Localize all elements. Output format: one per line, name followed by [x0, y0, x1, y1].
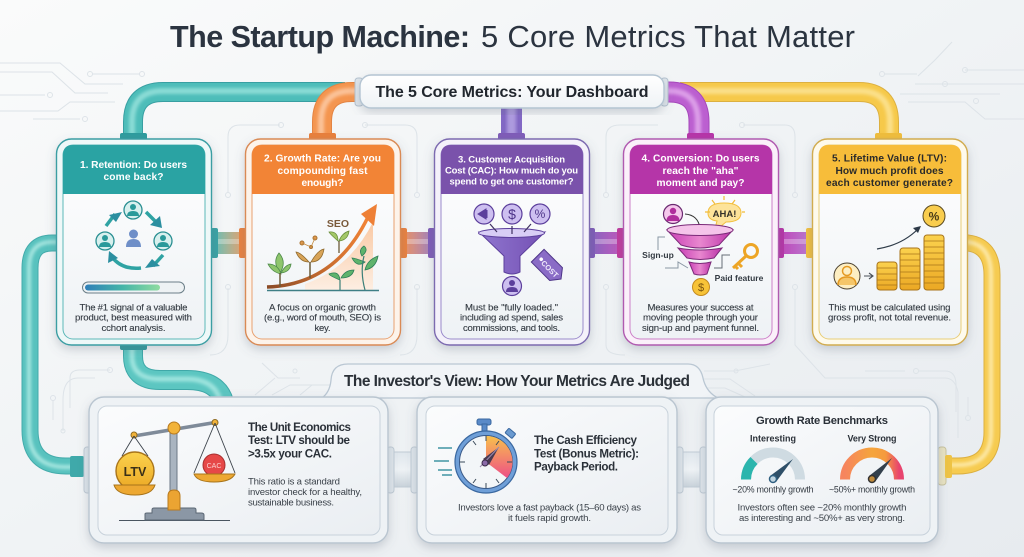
- chart: organic growth arrow: [267, 204, 379, 290]
- text: metric 3: commissions, and tools.: [463, 323, 560, 334]
- heading: metric 1: [80, 160, 187, 183]
- icon: retention loop: [96, 201, 172, 268]
- text: benchmarks: Investors often see ~20% monthly growth: [738, 502, 906, 514]
- icon: conversion funnel: [642, 196, 764, 296]
- pipe: magenta to card 4: [660, 91, 699, 136]
- heading: metric 1: come back?: [104, 172, 164, 183]
- icon: coin stacks growth: [834, 205, 945, 290]
- text: cash efficiency: Test (Bonus Metric):: [534, 448, 639, 460]
- text: metric 2: (e.g., word of mouth, SEO) is: [264, 312, 381, 324]
- text: cash efficiency: The Cash Efficiency: [534, 434, 638, 447]
- panel: investor view heading tab: [322, 364, 718, 398]
- icon: cost funnel: COST: [539, 259, 561, 280]
- panel: metric 5 lifetime value: [812, 133, 968, 345]
- icon: conversion funnel: Paid feature: [715, 273, 764, 283]
- pipe: yellow to card 5: [680, 91, 890, 136]
- text: metric 4: sign-up and payment funnel.: [642, 323, 759, 334]
- text: unit economics: This ratio is a standard: [248, 476, 340, 488]
- panel: metric 2 growth rate: [246, 133, 400, 345]
- panel: investor view heading tab: The Investor's View: How Your Metrics Are Judged: [344, 373, 690, 390]
- heading: benchmarks: Growth Rate Benchmarks: [756, 415, 888, 427]
- text: unit economics: The Unit Economics: [248, 421, 351, 434]
- heading: metric 3: Cost (CAC): How much do you: [445, 166, 578, 176]
- icon: conversion funnel: AHA!: [713, 209, 736, 220]
- connector: card 1 to card 2: [211, 228, 246, 258]
- icon: conversion funnel: $: [698, 282, 704, 294]
- heading: metric 4: moment and pay?: [656, 178, 744, 189]
- pipe: teal left to investor panel: [29, 242, 84, 477]
- text: unit economics: sustainable business.: [248, 498, 334, 508]
- heading: metric 2: [264, 154, 381, 189]
- text: metric 2: A focus on organic growth: [269, 302, 376, 314]
- text: metric 2: [264, 302, 381, 334]
- heading: metric 5: [826, 154, 953, 189]
- chart: organic growth arrow: SEO: [327, 218, 349, 230]
- text: metric 3: Must be "fully loaded.": [465, 302, 558, 314]
- icon: coin stacks growth: %: [929, 210, 940, 224]
- icon: cost funnel: $: [508, 206, 516, 222]
- icon: conversion funnel: Sign-up: [642, 250, 674, 260]
- text: benchmarks: as interesting and ~50%+ as very strong.: [739, 513, 905, 524]
- text: cash efficiency: [458, 434, 641, 524]
- heading: metric 5: each customer generate?: [826, 178, 953, 189]
- text: unit economics: [248, 421, 362, 508]
- icon: cost funnel: %: [535, 207, 546, 221]
- title: [170, 19, 855, 54]
- heading: metric 3: [445, 154, 578, 188]
- text: metric 1: cchort analysis.: [102, 323, 166, 334]
- text: metric 1: product, best measured with: [75, 312, 192, 324]
- heading: metric 2: 2. Growth Rate: Are you: [264, 154, 381, 164]
- panel: cash efficiency test: [417, 397, 677, 543]
- icon: balance scale: [114, 420, 235, 520]
- heading: metric 4: reach the "aha": [662, 166, 739, 177]
- text: cash efficiency: Payback Period.: [534, 460, 618, 474]
- icon: stopwatch: [434, 419, 517, 493]
- connector: panel 1 to panel 2: [387, 447, 418, 493]
- panel: metric 1 retention: [56, 133, 212, 350]
- gauge: very strong: ~50%+ monthly growth: [829, 484, 915, 494]
- heading: metric 5: How much profit does: [836, 166, 944, 177]
- title: The Startup Machine:: [170, 20, 470, 54]
- pipe: teal from card 1 down: [132, 343, 224, 402]
- text: metric 2: key.: [314, 323, 330, 334]
- heading: metric 3: spend to get one customer?: [450, 176, 574, 188]
- text: unit economics: Test: LTV should be: [248, 434, 351, 447]
- heading: metric 2: enough?: [302, 178, 344, 189]
- heading: metric 2: compounding fast: [278, 166, 368, 177]
- heading: metric 4: 4. Conversion: Do users: [642, 154, 760, 164]
- panel: dashboard heading: The 5 Core Metrics: Your Dashboard: [376, 84, 648, 101]
- text: metric 4: [642, 302, 759, 334]
- pipe: yellow right to investor panel: [938, 242, 992, 485]
- heading: metric 1: 1. Retention: Do users: [80, 160, 187, 171]
- heading: metric 3: 3. Customer Acquisition: [458, 154, 565, 166]
- pipe: purple to card 3: [501, 106, 522, 136]
- connector: card 2 to card 3: [400, 228, 435, 258]
- gauge: very strong: [829, 434, 915, 494]
- gauge: interesting: [732, 434, 814, 494]
- connector: panel 2 to panel 3: [676, 447, 707, 493]
- icon: balance scale: CAC: [207, 463, 221, 470]
- gauge: interesting: ~20% monthly growth: [732, 484, 814, 494]
- connector: card 4 to card 5: [777, 228, 813, 258]
- gauge: very strong: Very Strong: [848, 434, 896, 444]
- panel: metric 3 CAC: [434, 133, 590, 345]
- pipe: teal to card 1: [132, 91, 345, 136]
- title: 5 Core Metrics That Matter: [481, 19, 855, 54]
- text: metric 4: Measures your success at: [648, 302, 754, 314]
- text: metric 5: [828, 302, 951, 324]
- panel: growth rate benchmarks: [706, 397, 938, 543]
- text: metric 3: including ad spend, sales: [460, 312, 563, 324]
- text: metric 5: This must be calculated using: [828, 302, 950, 314]
- gauge: interesting: Interesting: [750, 434, 796, 444]
- text: unit economics: investor check for a healthy,: [248, 487, 362, 498]
- text: metric 3: [460, 302, 563, 334]
- text: metric 5: gross profit, not total revenue.: [828, 312, 951, 324]
- panel: metric 4 conversion: [624, 133, 778, 345]
- text: benchmarks: [738, 502, 906, 524]
- icon: cost funnel: [474, 204, 567, 296]
- progress bar: [82, 282, 184, 293]
- heading: metric 4: [642, 154, 760, 189]
- heading: metric 5: 5. Lifetime Value (LTV):: [832, 154, 947, 164]
- text: metric 1: [75, 302, 192, 334]
- panel: dashboard heading: [355, 75, 668, 108]
- connector: card 3 to card 4: [588, 228, 624, 258]
- panel: unit economics test: [84, 397, 388, 543]
- pipe: orange to card 2: [321, 91, 366, 136]
- text: unit economics: >3.5x your CAC.: [248, 448, 332, 460]
- text: cash efficiency: it fuels rapid growth.: [508, 513, 591, 524]
- text: metric 4: moving people through your: [643, 312, 759, 324]
- text: cash efficiency: Investors love a fast payback (15–60 days) as: [458, 502, 641, 514]
- text: metric 1: The #1 signal of a valuable: [80, 302, 188, 314]
- icon: balance scale: LTV: [124, 465, 147, 479]
